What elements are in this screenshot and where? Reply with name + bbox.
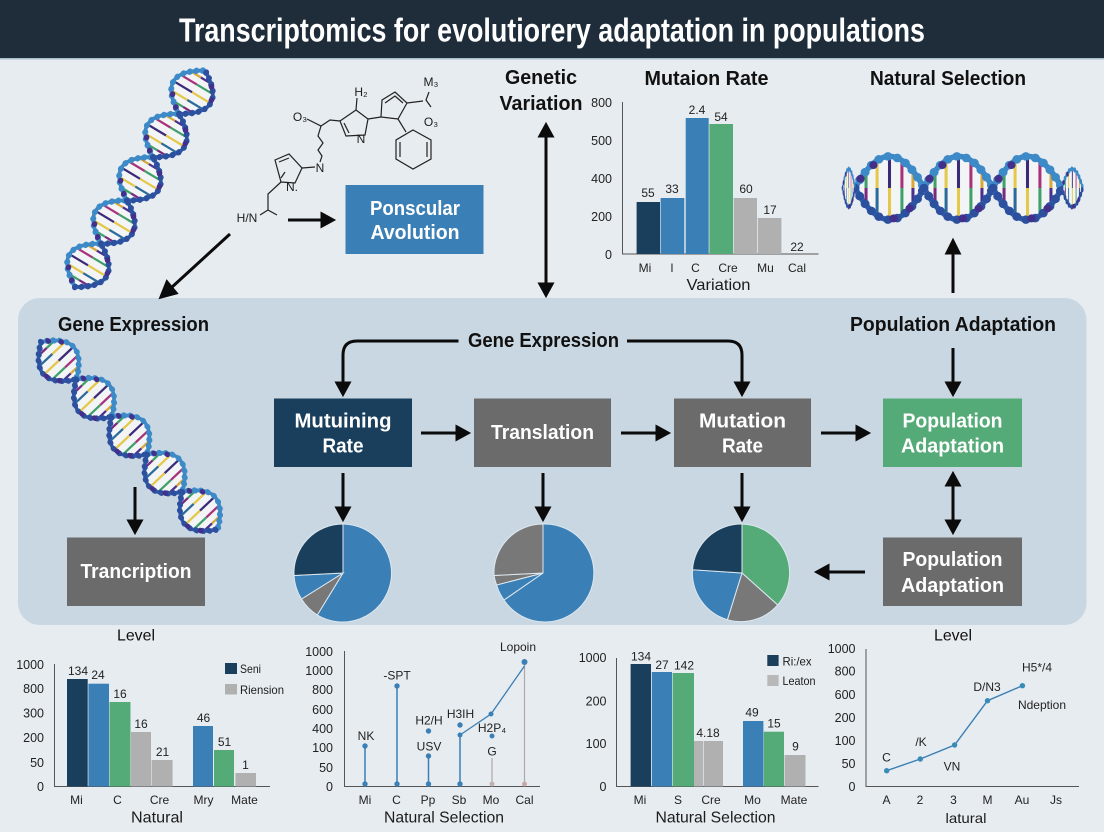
line chart: bottom right Level: 3 xyxy=(950,793,957,807)
arrow: Mutuining to pie xyxy=(337,473,349,519)
box: Mutation Rate: Rate xyxy=(722,436,763,458)
bar chart: bottom left Level: Cre xyxy=(150,793,169,807)
icon: DNA helix in panel xyxy=(26,328,232,543)
bar chart: bottom left Level: 51 xyxy=(218,735,231,749)
line chart: bottom right Level: 50 xyxy=(842,757,856,771)
bar chart: bottom left Level: 16 xyxy=(113,687,127,701)
lollipop line chart: Natural Selection: NK xyxy=(358,729,374,743)
bar chart: bottom Natural Selection: 15 xyxy=(767,716,781,730)
box: Translation: Translation xyxy=(491,422,594,444)
line chart: bottom right Level: 200 xyxy=(835,711,856,725)
bar chart: bottom Natural Selection: 0 xyxy=(600,780,607,794)
box: Mutuining Rate: Rate xyxy=(322,436,364,458)
arrow: Translation to Mutation xyxy=(621,427,668,439)
icon: molecular structure: N. xyxy=(286,180,298,194)
heading: Gene Expression left: Gene Expression xyxy=(58,314,209,336)
arrow: up to Natural Selection helix xyxy=(947,241,959,293)
panel: central workflow background xyxy=(18,298,1086,625)
bar chart: bottom Natural Selection: Mi xyxy=(634,793,646,807)
lollipop line chart: Natural Selection: USV xyxy=(417,740,441,754)
icon: molecular structure: H/N xyxy=(237,211,257,225)
heading: Genetic Variation: Genetic xyxy=(505,67,577,89)
box: Translation xyxy=(474,398,611,467)
bar chart: bottom Natural Selection: Cre xyxy=(701,793,721,807)
bar chart: bottom left Level xyxy=(16,628,284,826)
bar chart: bottom left Level: 21 xyxy=(156,745,169,759)
arrow: molecule to box xyxy=(288,214,333,226)
box: Population Adaptation grey xyxy=(883,538,1022,606)
box: Transcription xyxy=(67,538,205,606)
line chart: bottom right Level: M xyxy=(982,793,992,807)
bar chart: bottom Natural Selection xyxy=(579,650,818,826)
line chart: bottom right Level: C xyxy=(882,750,891,764)
lollipop line chart: Natural Selection: G xyxy=(487,744,497,758)
bar chart: bottom Natural Selection: 27 xyxy=(655,658,669,672)
bar chart: bottom Natural Selection: 200 xyxy=(586,694,607,708)
bar chart: bottom left Level: Mate xyxy=(231,793,258,807)
bar chart: bottom left Level: 200 xyxy=(23,731,44,745)
icon: DNA helix top left xyxy=(56,59,224,298)
bar chart: Mutation Rate: Variation xyxy=(686,277,750,294)
lollipop line chart: Natural Selection: Natural Selection xyxy=(384,810,504,826)
line chart: bottom right Level: latural xyxy=(946,810,986,826)
line chart: bottom right Level: 100 xyxy=(835,734,856,748)
heading: Gene Expression centre: Gene Expression xyxy=(468,330,619,352)
lollipop line chart: Natural Selection: H3IH xyxy=(447,707,474,721)
title: Transcriptomics for evolutiorery adaptation in populations xyxy=(179,12,925,48)
bar chart: bottom Natural Selection: Mate xyxy=(781,793,808,807)
bar chart: Mutation Rate: 2.4 xyxy=(689,103,706,117)
arrow: Gene Expression to Mutuining Rate xyxy=(337,341,458,394)
bar chart: Mutation Rate: 17 xyxy=(763,203,777,217)
box: Mutuining Rate: Mutuining xyxy=(294,410,392,432)
lollipop line chart: Natural Selection: 400 xyxy=(312,722,333,736)
lollipop line chart: Natural Selection: H2/H xyxy=(415,714,443,728)
lollipop line chart: Natural Selection: H2P₄ xyxy=(478,721,506,735)
box: Mutation Rate: Mutation xyxy=(699,410,786,432)
bar chart: bottom left Level: 46 xyxy=(197,711,210,725)
box: Mutation Rate xyxy=(674,398,811,467)
bar chart: bottom left Level: 134 xyxy=(68,664,88,678)
line chart: bottom right Level: /K xyxy=(915,735,927,749)
bar chart: Mutation Rate xyxy=(591,68,818,294)
bar chart: Mutation Rate: 54 xyxy=(714,110,728,124)
arrow: molecule to panel diagonal xyxy=(161,234,230,297)
lollipop line chart: Natural Selection: 1000 xyxy=(305,664,333,678)
lollipop line chart: Natural Selection: 600 xyxy=(312,703,333,717)
line chart: bottom right Level: H5*/4 xyxy=(1022,660,1052,674)
arrow: Gene Expression to Mutation Rate xyxy=(627,341,748,394)
lollipop line chart: Natural Selection: 800 xyxy=(312,683,333,697)
bar chart: bottom left Level: 1000 xyxy=(16,658,44,672)
bar chart: bottom left Level: 0 xyxy=(37,780,44,794)
bar chart: bottom Natural Selection: Mo xyxy=(744,793,761,807)
pie chart 1 xyxy=(294,524,392,622)
box: Population Adaptation grey: Adaptation xyxy=(901,575,1004,597)
lollipop line chart: Natural Selection: 100 xyxy=(312,741,333,755)
bar chart: bottom Natural Selection: Natural Selection xyxy=(656,810,776,826)
bar chart: Mutation Rate: C xyxy=(691,261,700,275)
lollipop line chart: Natural Selection: Mi xyxy=(359,793,371,807)
line chart: bottom right Level: A xyxy=(882,793,891,807)
bar chart: Mutation Rate: 800 xyxy=(591,96,612,110)
bar chart: bottom left Level: 800 xyxy=(23,682,44,696)
bar chart: bottom left Level: 24 xyxy=(91,668,105,682)
box: Population Adaptation grey: Population xyxy=(902,549,1002,571)
line chart: bottom right Level: Ndeption xyxy=(1018,698,1066,712)
line chart: bottom right Level: D/N3 xyxy=(973,680,1001,694)
bar chart: Mutation Rate: 33 xyxy=(665,182,679,196)
lollipop line chart: Natural Selection: 50 xyxy=(319,761,333,775)
line chart: bottom right Level: 0 xyxy=(849,780,856,794)
bar chart: Mutation Rate: 200 xyxy=(591,210,612,224)
box: Transcription: Trancription xyxy=(80,561,192,583)
arrow: Mutuining to Translation xyxy=(421,427,468,439)
box: Population Adaptation green: Population xyxy=(902,410,1002,432)
bar chart: Mutation Rate: Mu xyxy=(757,261,774,275)
bar chart: bottom Natural Selection: Ri:/ex xyxy=(782,654,812,668)
icon: molecular structure xyxy=(237,75,439,225)
lollipop line chart: Natural Selection: Pp xyxy=(421,793,436,807)
bar chart: Mutation Rate: 0 xyxy=(605,248,612,262)
lollipop line chart: Natural Selection: C xyxy=(392,793,401,807)
bar chart: bottom left Level: 50 xyxy=(30,756,44,770)
lollipop line chart: Natural Selection: Lopoin xyxy=(500,640,536,654)
bar chart: bottom left Level: Mi xyxy=(70,793,83,807)
bar chart: Mutation Rate: 400 xyxy=(591,172,612,186)
bar chart: bottom Natural Selection: Leaton xyxy=(782,674,816,688)
line chart: bottom right Level: Js xyxy=(1050,793,1062,807)
bar chart: Mutation Rate: 55 xyxy=(641,186,655,200)
arrow: Mutation to Population xyxy=(821,427,868,439)
line chart: bottom right Level: VN xyxy=(944,760,960,774)
box: Ponscular Avolution: Avolution xyxy=(370,222,460,244)
bar chart: Mutation Rate: Cre xyxy=(718,261,738,275)
bar chart: bottom left Level: 300 xyxy=(23,706,44,720)
lollipop line chart: Natural Selection: Mo xyxy=(483,793,500,807)
lollipop line chart: Natural Selection: 0 xyxy=(326,780,333,794)
bar chart: bottom Natural Selection: 142 xyxy=(674,658,694,672)
bar chart: Mutation Rate: 22 xyxy=(790,240,804,254)
line chart: bottom right Level: Au xyxy=(1015,793,1029,807)
lollipop line chart: Natural Selection: 1000 xyxy=(305,645,333,659)
arrow: double vertical xyxy=(540,125,552,295)
chart heading: Level xyxy=(934,628,972,644)
bar chart: bottom Natural Selection: 4.18 xyxy=(696,726,720,740)
icon: molecular structure: O₃ xyxy=(424,115,438,129)
pie chart 2 xyxy=(494,524,594,622)
arrow: Translation to pie xyxy=(537,473,549,519)
icon: molecular structure: N xyxy=(357,132,365,146)
arrow: population box to pie xyxy=(817,566,865,578)
box: Population Adaptation green xyxy=(883,398,1022,467)
arrow: Mutation to pie xyxy=(736,473,748,519)
box: Population Adaptation green: Adaptation xyxy=(901,436,1004,458)
bar chart: Mutation Rate: Cal xyxy=(788,261,806,275)
icon: molecular structure: H₂ xyxy=(354,85,368,99)
line chart: bottom right Level: 600 xyxy=(835,688,856,702)
bar chart: Mutation Rate: Mi xyxy=(639,261,651,275)
lollipop line chart: Natural Selection: -SPT xyxy=(383,668,411,682)
bar chart: bottom left Level: C xyxy=(113,793,122,807)
bar chart: bottom left Level: Mry xyxy=(194,793,214,807)
line chart: bottom right Level: 800 xyxy=(835,664,856,678)
lollipop line chart: Natural Selection xyxy=(305,640,540,826)
bar chart: bottom Natural Selection: 9 xyxy=(792,740,799,754)
bar chart: bottom Natural Selection: 49 xyxy=(745,706,759,720)
lollipop line chart: Natural Selection: Cal xyxy=(515,793,534,807)
arrow: down to green box xyxy=(947,348,959,394)
chart heading: Level xyxy=(117,628,155,644)
header bar xyxy=(0,0,1104,60)
box: Mutuining Rate xyxy=(274,398,412,467)
bar chart: bottom left Level: Seni xyxy=(240,662,261,676)
bar chart: bottom Natural Selection: S xyxy=(674,793,682,807)
box: Ponscular Avolution xyxy=(346,185,484,254)
arrow: helix to Transcription xyxy=(129,487,141,532)
bar chart: Mutation Rate: 60 xyxy=(739,182,753,196)
bar chart: bottom Natural Selection: 134 xyxy=(631,650,651,664)
heading: Genetic Variation: Variation xyxy=(500,93,582,115)
bar chart: bottom left Level: Natural xyxy=(131,810,183,826)
bar chart: bottom Natural Selection: 100 xyxy=(586,737,607,751)
bar chart: bottom left Level: Riension xyxy=(240,683,284,697)
icon: molecular structure: M₃ xyxy=(424,75,439,89)
lollipop line chart: Natural Selection: Sb xyxy=(452,793,467,807)
bar chart: Mutation Rate: 500 xyxy=(591,134,612,148)
bar chart: bottom left Level: 16 xyxy=(134,717,148,731)
bar chart: bottom Natural Selection: 1000 xyxy=(579,651,607,665)
heading: Natural Selection: Natural Selection xyxy=(870,68,1026,90)
arrow: double between population boxes xyxy=(947,474,959,532)
chart title: Mutaion Rate xyxy=(644,68,768,90)
icon: molecular structure: N xyxy=(316,161,324,175)
line chart: bottom right Level: 1000 xyxy=(828,642,856,656)
line chart: bottom right Level: 2 xyxy=(917,793,924,807)
line chart: bottom right Level xyxy=(828,628,1079,826)
icon: molecular structure: O₃ xyxy=(293,110,307,124)
bar chart: bottom left Level: 1 xyxy=(242,758,249,772)
pie chart 3 xyxy=(692,524,790,622)
box: Ponscular Avolution: Ponscular xyxy=(370,198,460,220)
bar chart: Mutation Rate: l xyxy=(671,261,673,275)
heading: Genetic Variation xyxy=(500,67,582,115)
heading: Population Adaptation: Population Adaptation xyxy=(850,314,1056,336)
icon: DNA helix top right xyxy=(843,156,1083,220)
